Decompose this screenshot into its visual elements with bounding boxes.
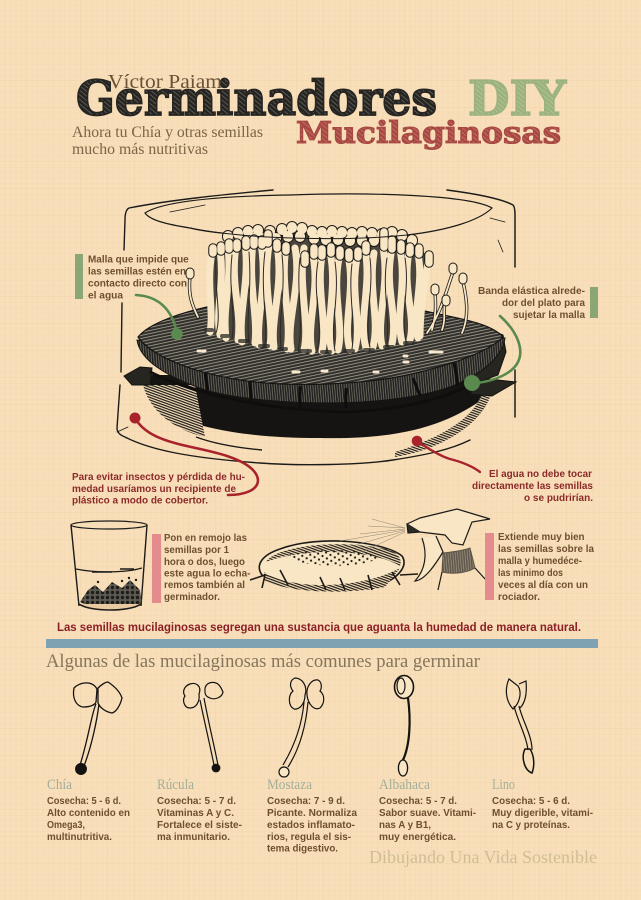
callout: plastic cover: [72, 412, 258, 506]
highlighted statement: Las semillas mucilaginosas segregan una sustancia que aguanta la humedad de manera natural.: [57, 622, 581, 634]
text: spread and mist seeds: las minimo dos: [498, 568, 563, 579]
callout: elastic band: sujetar la malla: [513, 310, 585, 321]
seedling: mostaza: rios, regula el sis-: [267, 832, 351, 843]
dish side tabs: [124, 330, 516, 396]
seedling: chía: Alto contenido en: [47, 808, 130, 819]
section heading: Algunas de las mucilaginosas más comunes para germinar: [46, 651, 481, 672]
text: soak the seeds: remos también al: [164, 580, 245, 591]
text: spread and mist seeds: rociador.: [498, 592, 540, 603]
seedling: rúcula: Cosecha: 5 - 7 d.: [157, 796, 236, 807]
seedling: lino: na C y proteínas.: [492, 820, 570, 831]
sprout base seeds: [206, 330, 413, 352]
text: spread and mist seeds: veces al día con un: [498, 580, 588, 591]
rim shadow joints: [150, 362, 470, 412]
mesh drainage holes: [198, 351, 442, 372]
icon: rúcula sprout: [184, 682, 223, 772]
seedling: mostaza: Picante. Normaliza: [267, 808, 357, 819]
seedling: mostaza: Cosecha: 7 - 9 d.: [267, 796, 345, 807]
icon: chía sprout: [73, 682, 122, 774]
blue divider bar: [46, 639, 598, 648]
icon: glass with seeds in water: [71, 521, 147, 610]
jar front rim line over sprouts: [190, 228, 407, 239]
text: soak the seeds: hora o dos, luego: [164, 557, 245, 568]
seedling: albahaca: muy energética.: [379, 832, 456, 843]
seedling: mostaza: estados inflamato-: [267, 820, 355, 831]
seedling: mostaza: tema digestivo.: [267, 844, 338, 854]
seedling: lino: Muy digerible, vitami-: [492, 808, 593, 819]
sprout front heads: [213, 232, 429, 263]
seedling: mostaza: Mostaza: [267, 777, 313, 793]
top plate rim: [137, 338, 505, 403]
seedling: chía: Chía: [47, 777, 73, 793]
callout: elastic band: dor del plato para: [502, 298, 585, 309]
lower dish: [143, 375, 490, 457]
text: soak the seeds: este agua lo echa-: [164, 568, 250, 580]
callout: mesh: contacto directo con: [88, 278, 187, 290]
top plate surface: [138, 301, 503, 384]
seedling: rúcula: Rúcula: [157, 777, 195, 793]
seedling: rúcula: Vitaminas A y C.: [157, 808, 234, 819]
callout: water: directamente las semillas: [472, 481, 593, 492]
seedling: chía: multinutritiva.: [47, 832, 112, 843]
icon: spray bottle: [340, 509, 490, 590]
seedling: albahaca: [379, 676, 476, 843]
callout: water: o se pudrirían.: [524, 493, 593, 504]
footer signature: Dibujando Una Vida Sostenible: [369, 847, 597, 867]
icon: albahaca sprout: [394, 676, 414, 776]
callout: elastic band: Banda elástica alrede-: [478, 286, 585, 297]
callout: plastic cover: plástico a modo de cobertor.: [72, 496, 208, 506]
subtitle: Ahora tu Chía y otras semillas: [72, 124, 263, 141]
seedling: rúcula: ma inmunitario.: [157, 832, 230, 843]
stray sprouts: [189, 267, 467, 333]
callout: plastic cover: Para evitar insectos y pérdida de hu-: [72, 472, 245, 483]
title: DIY: DIY: [468, 71, 567, 127]
seedling: albahaca: nas A y B1,: [379, 820, 431, 831]
author name: Víctor Paiam: [108, 71, 222, 93]
callout: mesh: el agua: [88, 290, 123, 302]
seedling: albahaca: Albahaca: [379, 777, 431, 793]
callout: mesh: las semillas estén en: [88, 266, 186, 278]
text: soak the seeds: semillas por 1: [164, 545, 229, 556]
text: soak the seeds: Pon en remojo las: [164, 533, 247, 544]
callout: water: El agua no debe tocar: [489, 469, 592, 480]
main illustration: germinator under plastic cover: [117, 190, 516, 465]
seedling: albahaca: Sabor suave. Vitami-: [379, 808, 476, 819]
title: Germinadores: Germinadores: [76, 71, 437, 127]
sprout stems: [210, 243, 428, 351]
text: soak the seeds: [152, 533, 250, 603]
text: spread and mist seeds: malla y humedéce-: [498, 556, 582, 567]
seedling: lino: Cosecha: 5 - 6 d.: [492, 796, 570, 807]
plastic cover jar: [117, 190, 515, 465]
seedling: chía: Omega3,: [47, 820, 85, 831]
seedling: albahaca: Cosecha: 5 - 7 d.: [379, 796, 457, 807]
seedling: rúcula: [157, 682, 242, 843]
subtitle: mucho más nutritivas: [72, 141, 208, 158]
seedling: mostaza: [267, 678, 357, 854]
callout: mesh: [75, 254, 189, 340]
icon: mostaza sprout: [279, 678, 324, 777]
seedling: lino: Lino: [492, 777, 515, 793]
text: soak the seeds: germinador.: [164, 592, 220, 603]
text: spread and mist seeds: [485, 532, 594, 603]
seedling: chía: [47, 682, 130, 843]
seedling: rúcula: Fortalece el siste-: [157, 820, 242, 831]
icon: lino sprout: [506, 679, 534, 773]
icon: plate with mesh and seeds: [250, 541, 418, 592]
callout: mesh: Malla que impide que: [88, 254, 189, 266]
seedling: chía: Cosecha: 5 - 6 d.: [47, 796, 121, 807]
callout: water: [412, 436, 593, 504]
sprout back heads: [228, 227, 412, 241]
callout: plastic cover: medad usaríamos un recipiente de: [72, 484, 236, 495]
subtitle: [72, 124, 263, 158]
title: Mucilaginosas: Mucilaginosas: [296, 116, 561, 151]
sprout shadow backing: [207, 231, 430, 352]
callout: elastic band: [464, 286, 598, 391]
sprouts: [189, 227, 467, 352]
text: spread and mist seeds: las semillas sobre la: [498, 544, 594, 555]
seedling: lino: [492, 679, 593, 831]
text: spread and mist seeds: Extiende muy bien: [498, 532, 584, 543]
